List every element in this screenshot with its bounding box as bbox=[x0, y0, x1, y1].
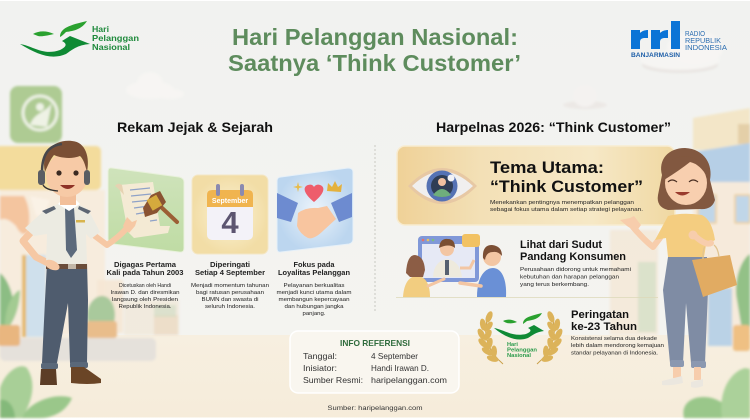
panel: info referensi: INFO REFERENSI bbox=[340, 338, 410, 348]
caption: card 2: seluruh Indonesia. bbox=[205, 304, 255, 310]
caption: card 2: Setiap 4 September bbox=[195, 270, 265, 277]
caption: card 1: langsung oleh Presiden bbox=[112, 297, 178, 303]
heading: Harpelnas 2026: Harpelnas 2026: “Think Customer” bbox=[436, 119, 671, 135]
caption: card 2: bagi ratusan perusahaan bbox=[196, 290, 264, 296]
panel: info referensi bbox=[290, 331, 459, 393]
text: 23rd anniversary: ke-23 Tahun bbox=[571, 321, 637, 333]
caption: card 3 bbox=[276, 262, 352, 317]
caption: card 2: Menjadi momentum tahunan bbox=[191, 283, 269, 289]
card: calendar: 4 bbox=[221, 205, 239, 240]
card: calendar bbox=[192, 175, 268, 254]
icon: laurel wreath with logo: Hari bbox=[507, 342, 518, 348]
card: handshake bbox=[277, 168, 353, 252]
icon: laurel wreath with logo: Nasional bbox=[507, 353, 531, 359]
panel: theme banner: Menekankan pentingnya menempatkan pelanggan bbox=[490, 200, 634, 206]
panel: theme banner: “Think Customer” bbox=[490, 177, 643, 196]
panel: theme banner: Tema Utama: bbox=[490, 158, 604, 177]
caption: card 2 bbox=[191, 262, 269, 310]
text: 23rd anniversary: lebih dalam mendorong kemajuan bbox=[571, 343, 664, 349]
icon: eye bbox=[408, 168, 477, 204]
title: Hari Pelanggan Nasional: bbox=[232, 24, 518, 50]
text: 23rd anniversary: Peringatan bbox=[571, 309, 629, 321]
caption: card 3: menjadi kunci utama dalam bbox=[276, 290, 352, 296]
blurred shop right bbox=[610, 108, 750, 351]
logo: Hari Pelanggan Nasional bbox=[20, 21, 139, 57]
caption: card 3: panjang. bbox=[302, 311, 326, 317]
card: gavel and scroll bbox=[108, 168, 184, 252]
caption: card 1: Irawan D. dan diresmikan bbox=[110, 290, 180, 296]
card: calendar: September bbox=[212, 198, 248, 205]
blurred shop left bbox=[0, 86, 179, 361]
caption: card 2: BUMN dan swasta di bbox=[202, 297, 258, 303]
panel: info referensi: Sumber Resmi: bbox=[303, 375, 363, 385]
source: Sumber: haripelanggan.com bbox=[328, 405, 423, 412]
illustration: consumer perspective bbox=[403, 234, 506, 297]
logo: RRI Banjarmasin: RADIO bbox=[685, 31, 705, 38]
caption: card 1 bbox=[106, 262, 184, 310]
caption: card 1: Digagas Pertama bbox=[114, 262, 176, 269]
divider bbox=[374, 145, 376, 312]
logo: Hari Pelanggan Nasional: Hari bbox=[92, 25, 109, 34]
caption: card 3: Loyalitas Pelanggan bbox=[278, 270, 350, 277]
panel: info referensi: Inisiator: bbox=[303, 363, 337, 373]
clouds bbox=[126, 31, 723, 109]
heading: Rekam Jejak & Sejarah: Rekam Jejak & Sejarah bbox=[117, 119, 273, 135]
caption: card 1: Republik Indonesia. bbox=[118, 304, 172, 310]
panel: info referensi: haripelanggan.com bbox=[371, 375, 447, 385]
caption: card 3: Pelayanan berkualitas bbox=[284, 283, 345, 289]
title: Saatnya ‘Think Customer’ bbox=[228, 50, 521, 76]
icon: laurel wreath with logo bbox=[476, 310, 564, 364]
text: consumer perspective: Lihat dari Sudut bbox=[520, 239, 602, 251]
panel: theme banner: sebagai fokus utama dalam setiap strategi pelayanan. bbox=[490, 207, 643, 213]
panel: theme banner bbox=[397, 146, 675, 225]
text: 23rd anniversary: standar pelayanan di Indonesia. bbox=[571, 350, 658, 356]
caption: card 2: Diperingati bbox=[210, 262, 250, 269]
panel: info referensi: Tanggal: bbox=[303, 351, 337, 361]
caption: card 1: Kali pada Tahun 2003 bbox=[106, 270, 184, 277]
foreground plants bbox=[0, 366, 750, 418]
caption: card 3: Fokus pada bbox=[294, 262, 335, 269]
text: 23rd anniversary bbox=[571, 309, 664, 356]
text: consumer perspective bbox=[520, 239, 631, 288]
logo: Hari Pelanggan Nasional: Nasional bbox=[92, 43, 130, 52]
logo: RRI Banjarmasin: BANJARMASIN bbox=[631, 53, 680, 59]
caption: card 1: Dicetuskan oleh Handi bbox=[119, 283, 171, 289]
character: customer service man bbox=[23, 141, 137, 385]
logo: Hari Pelanggan Nasional: Pelanggan bbox=[92, 34, 139, 43]
character: customer woman bbox=[620, 148, 737, 388]
logo: RRI Banjarmasin: INDONESIA bbox=[685, 45, 727, 52]
icon: laurel wreath with logo: Pelanggan bbox=[507, 348, 538, 354]
text: consumer perspective: Perusahaan didorong untuk memahami bbox=[520, 267, 631, 273]
panel: info referensi: Handi Irawan D. bbox=[371, 363, 429, 373]
caption: card 3: dan hubungan jangka bbox=[284, 304, 344, 310]
text: consumer perspective: kebutuhan dan harapan pelanggan bbox=[520, 274, 619, 280]
text: 23rd anniversary: Konsistensi selama dua dekade bbox=[571, 336, 657, 342]
panel: info referensi: 4 September bbox=[371, 351, 418, 361]
text: consumer perspective: Pandang Konsumen bbox=[520, 251, 626, 263]
logo: RRI Banjarmasin bbox=[631, 21, 727, 59]
caption: card 3: membangun kepercayaan bbox=[278, 297, 350, 303]
logo: RRI Banjarmasin: REPUBLIK bbox=[685, 38, 721, 45]
text: consumer perspective: yang terus berkembang. bbox=[520, 282, 589, 288]
title bbox=[228, 24, 521, 76]
